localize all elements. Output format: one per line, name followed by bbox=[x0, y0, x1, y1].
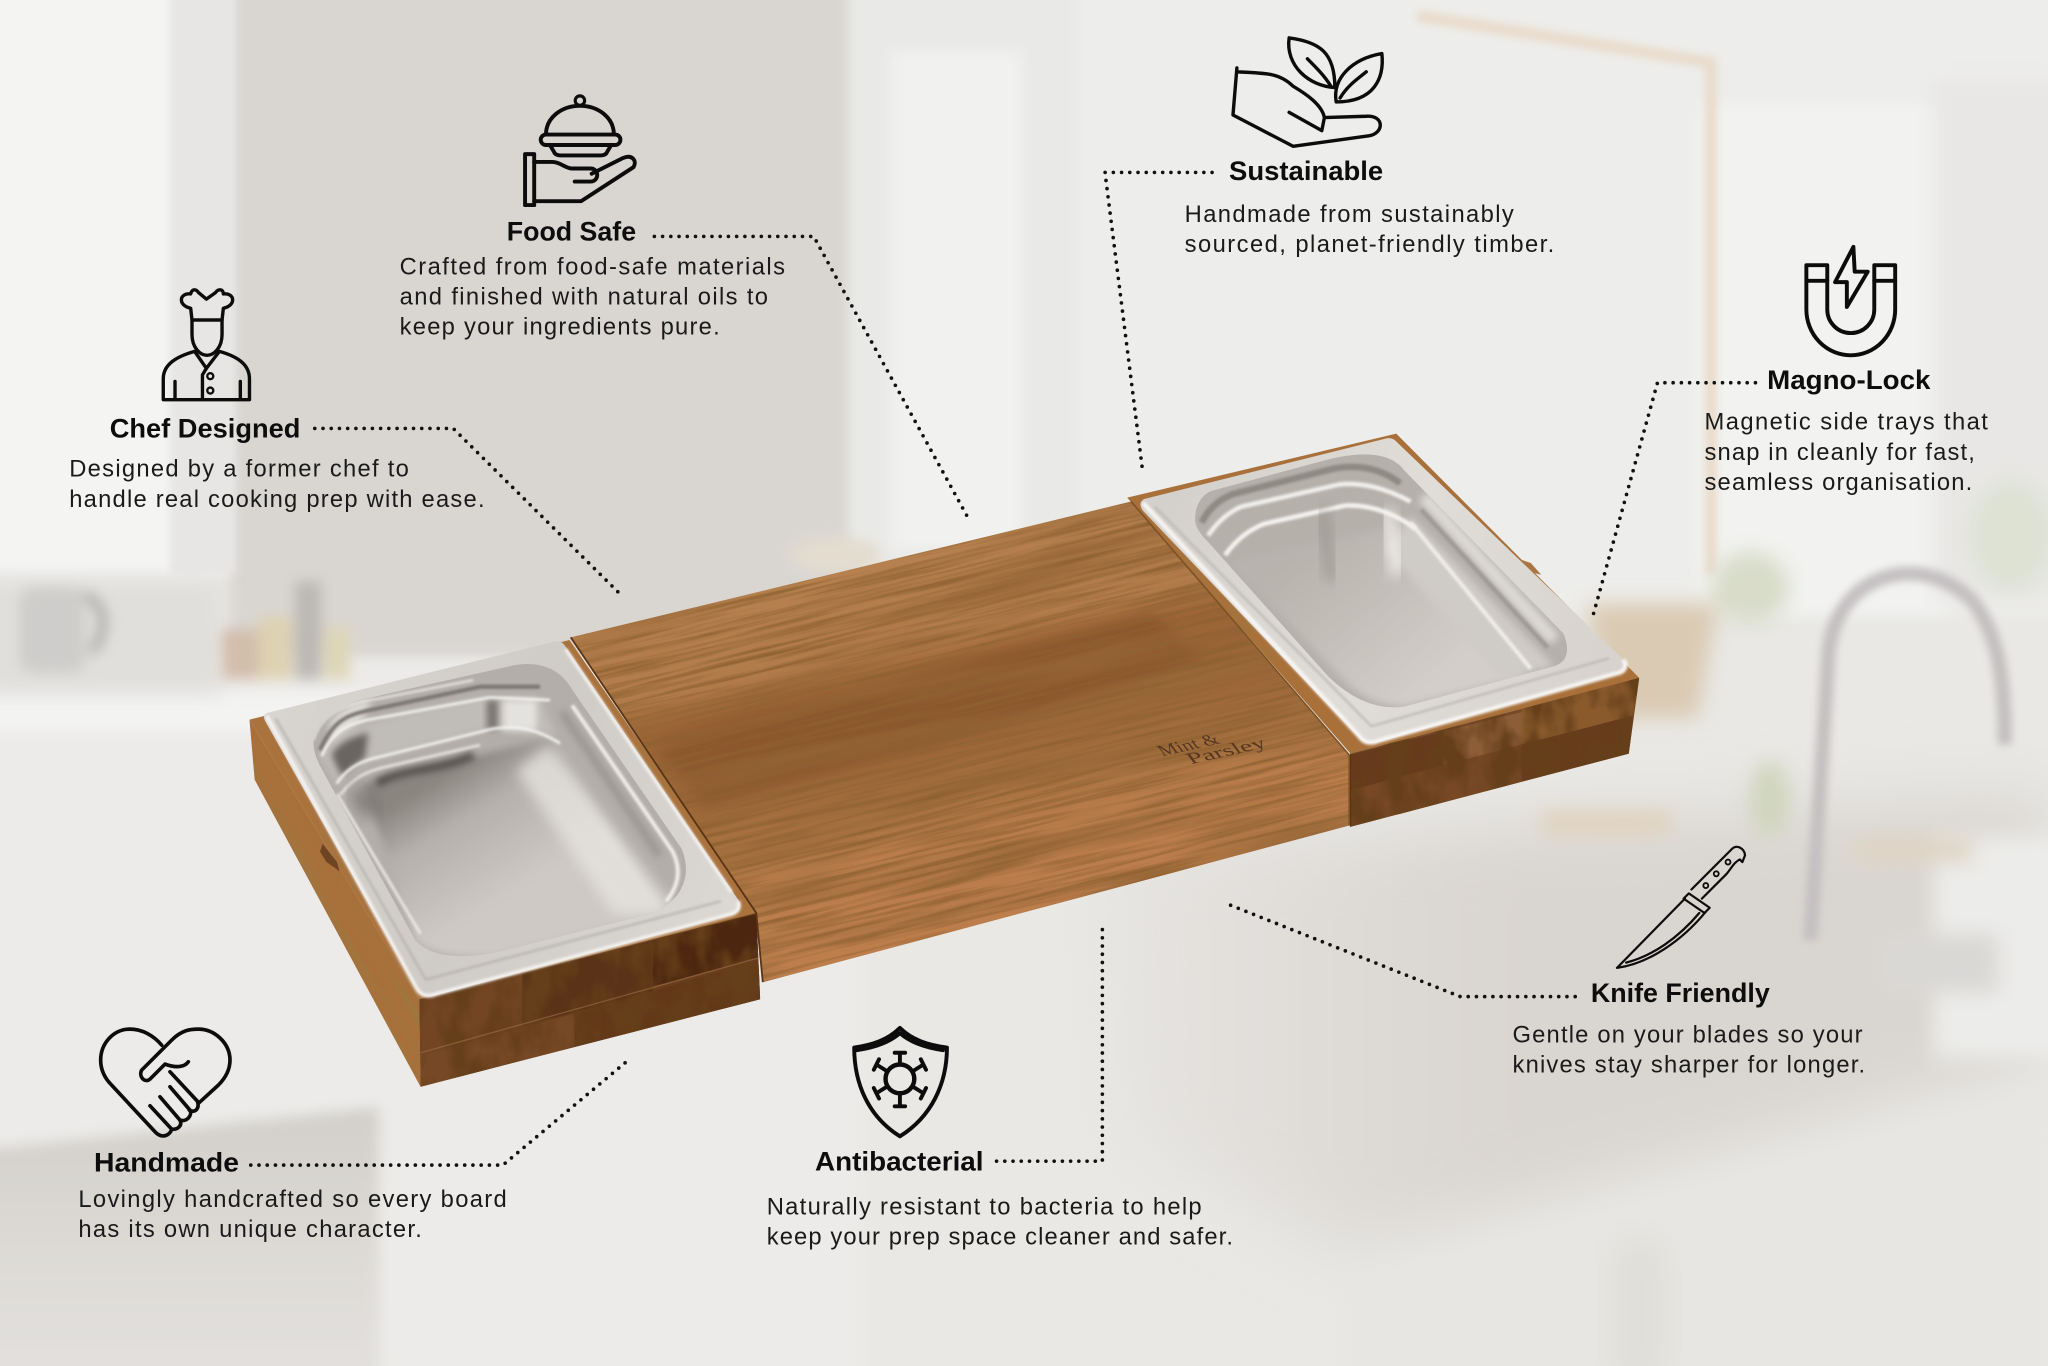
left tray: well reflections bbox=[313, 680, 560, 813]
feature: Food Safe bbox=[400, 96, 969, 520]
description: Lovingly handcrafted so every board bbox=[78, 1186, 507, 1213]
description: keep your ingredients pure. bbox=[400, 313, 720, 340]
description: Crafted from food-safe materials bbox=[400, 253, 785, 280]
description bbox=[400, 253, 785, 340]
background: blurred faucet bbox=[1810, 574, 2005, 940]
logo: Mint & Parsley: Mint & bbox=[1153, 730, 1224, 759]
feature: Antibacterial bbox=[767, 922, 1233, 1251]
description: has its own unique character. bbox=[78, 1216, 422, 1243]
description bbox=[767, 1194, 1233, 1251]
heading: Magno-Lock bbox=[1767, 365, 1931, 395]
right tray: wooden box bbox=[1127, 434, 1640, 827]
description: keep your prep space cleaner and safer. bbox=[767, 1224, 1233, 1251]
centre chopping board bbox=[570, 501, 1350, 982]
feature: Sustainable bbox=[1105, 38, 1554, 473]
description: and finished with natural oils to bbox=[400, 283, 768, 310]
heading: Chef Designed bbox=[110, 414, 300, 444]
feature: Chef Designed bbox=[69, 290, 623, 597]
icon: serving hand with cloche bbox=[525, 96, 635, 205]
description bbox=[1512, 1021, 1865, 1078]
connector bbox=[654, 236, 969, 520]
description: Handmade from sustainably bbox=[1185, 201, 1514, 228]
heading: Knife Friendly bbox=[1591, 978, 1770, 1008]
heading: Food Safe bbox=[507, 216, 636, 246]
feature: Knife Friendly bbox=[1224, 847, 1865, 1078]
connector bbox=[251, 1058, 631, 1165]
feature: Magno-Lock bbox=[1593, 247, 1988, 614]
left tray: wooden box bbox=[250, 640, 760, 1087]
left tray: steel insert bbox=[264, 641, 740, 996]
background: bowl and green plants bbox=[1541, 481, 2048, 993]
description: seamless organisation. bbox=[1704, 469, 1972, 496]
description bbox=[1185, 201, 1554, 258]
heading: Handmade bbox=[94, 1148, 239, 1178]
description bbox=[69, 456, 485, 513]
icon: heart handshake bbox=[101, 1029, 230, 1136]
logo: Mint & Parsley: Parsley bbox=[1182, 734, 1272, 767]
description: Gentle on your blades so your bbox=[1512, 1021, 1863, 1048]
connector bbox=[997, 922, 1102, 1161]
heading: Sustainable bbox=[1229, 156, 1383, 186]
connector bbox=[1224, 903, 1575, 997]
description: Naturally resistant to bacteria to help bbox=[767, 1194, 1202, 1221]
icon: hand with leaves bbox=[1233, 38, 1382, 146]
description bbox=[1704, 409, 1988, 496]
description: sourced, planet-friendly timber. bbox=[1185, 231, 1554, 258]
right tray: steel insert bbox=[1141, 438, 1625, 743]
icon: chef knife bbox=[1617, 847, 1745, 968]
connector bbox=[1593, 383, 1755, 614]
description: snap in cleanly for fast, bbox=[1704, 439, 1975, 466]
icon: shield with virus bbox=[854, 1028, 947, 1136]
description: Magnetic side trays that bbox=[1704, 409, 1988, 436]
description bbox=[78, 1186, 507, 1243]
description: knives stay sharper for longer. bbox=[1512, 1051, 1865, 1078]
description: handle real cooking prep with ease. bbox=[69, 486, 485, 513]
product: wooden chopping board with steel trays bbox=[129, 387, 1704, 1111]
background: wooden shelf strip bbox=[1417, 16, 1711, 575]
logo: Mint & Parsley bbox=[1153, 730, 1272, 767]
icon: chef bbox=[163, 290, 249, 400]
description: Designed by a former chef to bbox=[69, 456, 409, 483]
connector bbox=[1105, 172, 1212, 473]
icon: magnet with bolt bbox=[1806, 247, 1895, 355]
connector bbox=[315, 428, 623, 597]
feature: Handmade bbox=[78, 1029, 631, 1243]
background: kettle and counter items bbox=[20, 537, 882, 679]
heading: Antibacterial bbox=[815, 1146, 984, 1176]
